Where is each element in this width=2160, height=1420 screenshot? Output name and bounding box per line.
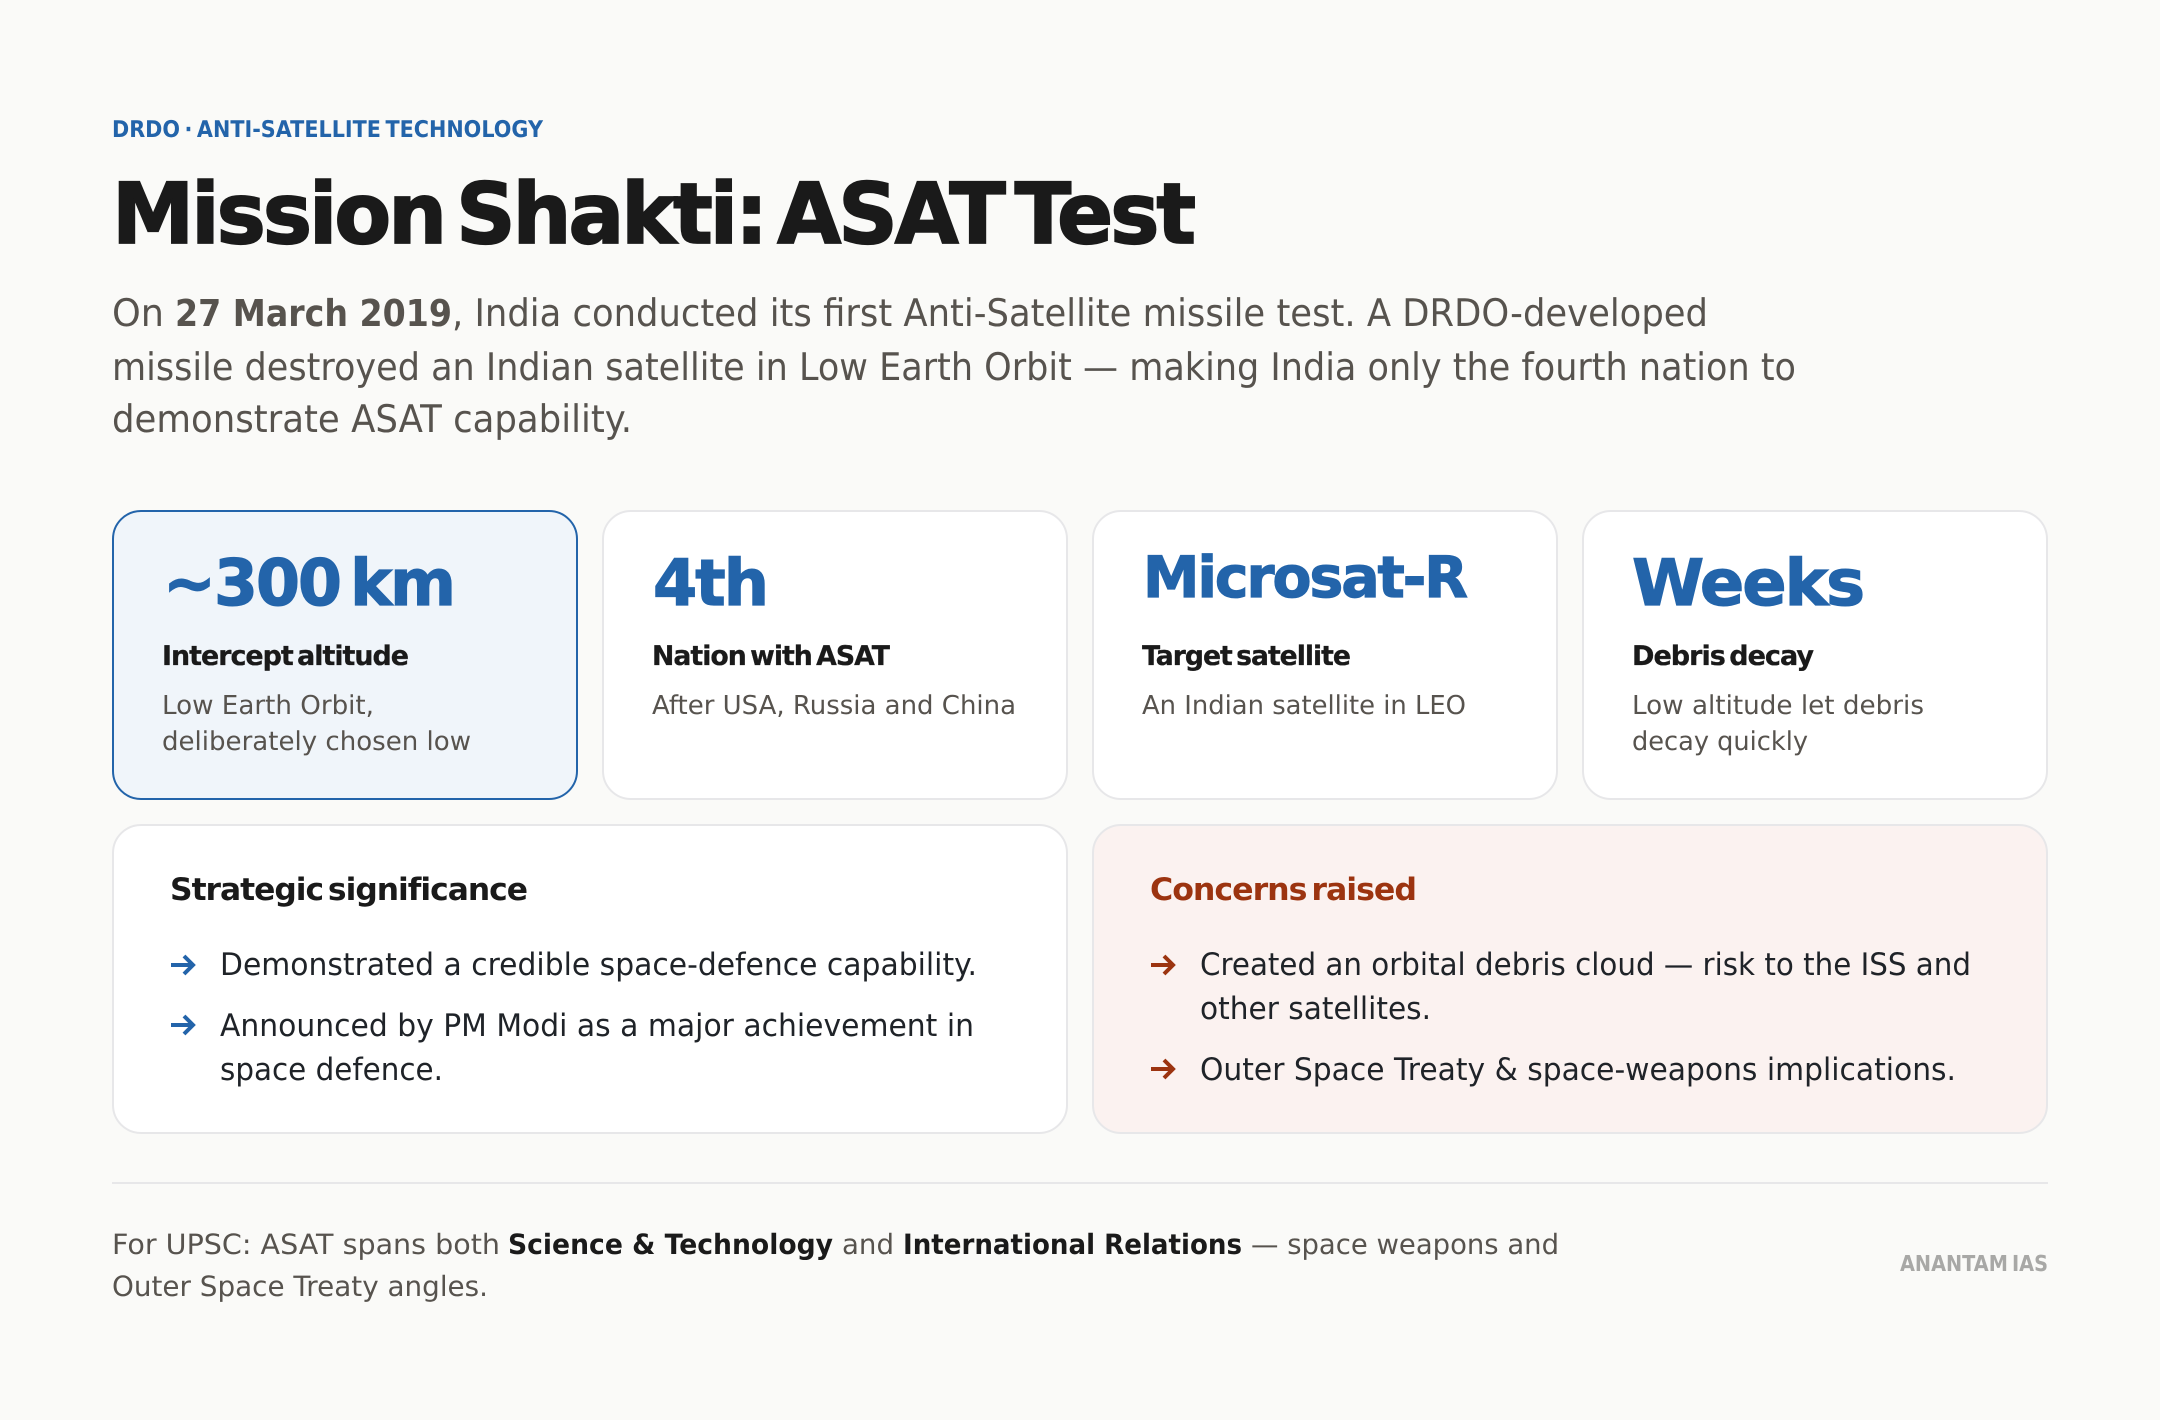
- stat card: target satellite: Microsat-R: [1143, 545, 1467, 611]
- panel: strategic significance: Demonstrated a credible space-defence capability.: [220, 947, 977, 983]
- stat card: nation with ASAT: Nation with ASAT: [652, 641, 891, 672]
- stat card: nation with ASAT: After USA, Russia and China: [652, 691, 1016, 721]
- intro text: missile destroyed an Indian satellite in Low Earth Orbit — making India only the fourth nation to: [112, 345, 1796, 389]
- footer note: International Relations: [903, 1228, 1242, 1261]
- stat card: intercept altitude: Low Earth Orbit,: [162, 691, 374, 721]
- panel: concerns raised: Created an orbital debris cloud — risk to the ISS and: [1200, 947, 1971, 983]
- stat card: debris decay: Weeks: [1632, 547, 1863, 621]
- panel: strategic significance: [113, 825, 1067, 1133]
- eyebrow: DRDO · ANTI-SATELLITE TECHNOLOGY: [112, 117, 543, 143]
- intro text: On: [112, 291, 164, 335]
- panel: strategic significance: Strategic significance: [170, 872, 527, 908]
- stat card: intercept altitude: deliberately chosen low: [162, 727, 471, 757]
- stat card: intercept altitude: [113, 511, 577, 799]
- stat card: target satellite: [1093, 511, 1557, 799]
- panel: concerns raised: [1093, 825, 2047, 1133]
- panel: concerns raised: other satellites.: [1200, 991, 1431, 1027]
- stat card: debris decay: Debris decay: [1632, 641, 1814, 672]
- footer note: [112, 1228, 1559, 1303]
- panel: strategic significance: space defence.: [220, 1052, 443, 1088]
- panel: strategic significance: Announced by PM Modi as a major achievement in: [220, 1008, 974, 1044]
- footer note: and: [842, 1228, 894, 1261]
- stat card: intercept altitude: Intercept altitude: [162, 641, 408, 672]
- panel: concerns raised: Concerns raised: [1150, 872, 1416, 908]
- stat card: debris decay: [1583, 511, 2047, 799]
- stat card: target satellite: Target satellite: [1142, 641, 1350, 672]
- stat card: target satellite: An Indian satellite in LEO: [1142, 691, 1466, 721]
- stat card: intercept altitude: ~300 km: [163, 547, 454, 621]
- footer note: Science & Technology: [508, 1228, 833, 1261]
- stat card: nation with ASAT: 4th: [653, 547, 767, 621]
- panel: concerns raised: Outer Space Treaty & space-weapons implications.: [1200, 1052, 1956, 1088]
- footer note: Outer Space Treaty angles.: [112, 1270, 488, 1303]
- stat card: debris decay: decay quickly: [1632, 727, 1808, 757]
- intro text: , India conducted its first Anti-Satellite missile test. A DRDO-developed: [452, 291, 1708, 335]
- brand mark: ANANTAM IAS: [1900, 1252, 2048, 1277]
- footer note: For UPSC: ASAT spans both: [112, 1228, 500, 1261]
- stat card: debris decay: Low altitude let debris: [1632, 691, 1924, 721]
- stat card: nation with ASAT: [603, 511, 1067, 799]
- intro text: [112, 291, 1796, 441]
- intro text: demonstrate ASAT capability.: [112, 397, 632, 441]
- intro text: 27 March 2019: [175, 292, 452, 335]
- footer note: — space weapons and: [1251, 1228, 1559, 1261]
- title: Mission Shakti: ASAT Test: [112, 165, 1195, 263]
